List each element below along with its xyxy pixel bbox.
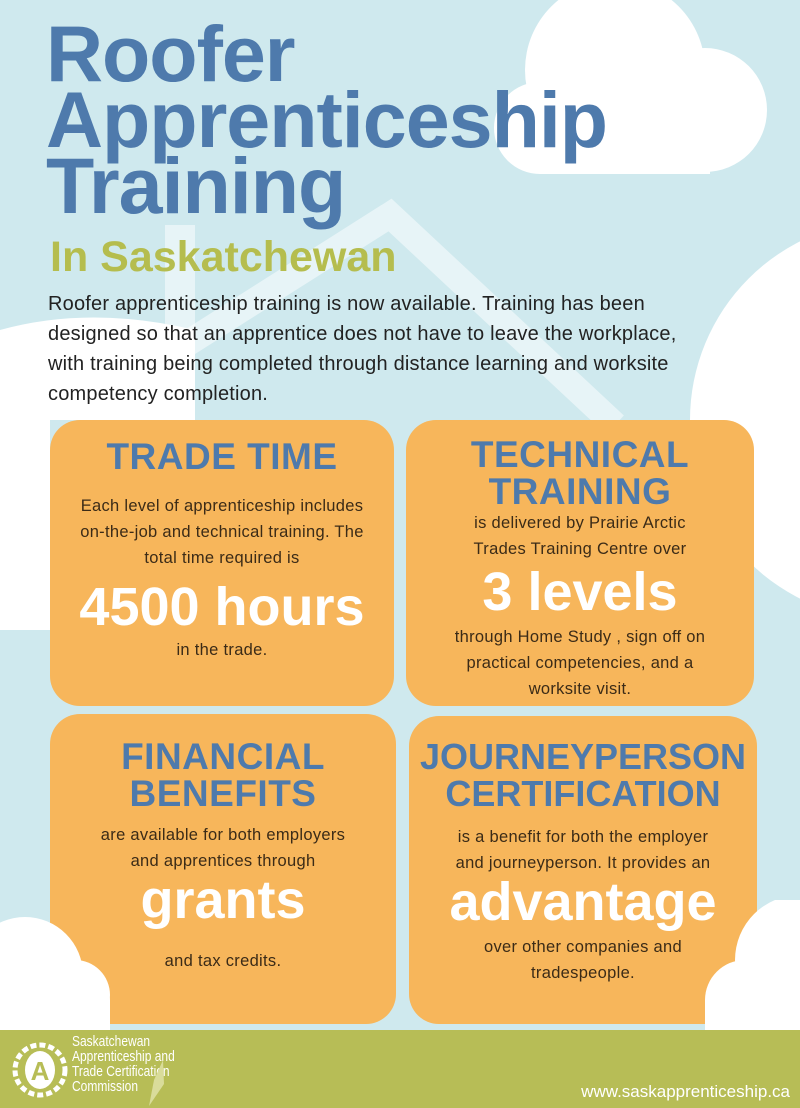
text: home study: worksite visit. — [529, 680, 631, 698]
intro paragraph: with training being completed through distance learning and worksite — [48, 353, 669, 375]
text: trade time: Each level of apprenticeship includes — [81, 497, 363, 515]
text: grants intro: and apprentices through — [131, 852, 315, 870]
text: grants intro: are available for both employers — [101, 826, 345, 844]
text: over others: tradespeople. — [531, 964, 635, 982]
organisation name: Saskatchewan — [72, 1033, 150, 1050]
organisation name: Commission — [72, 1078, 138, 1095]
title: Roofer — [46, 9, 295, 98]
text: delivered — [474, 514, 686, 558]
text: over others — [484, 938, 682, 982]
text: benefit: and journeyperson. It provides an — [456, 854, 710, 872]
heading: financial benefits: FINANCIAL — [121, 736, 325, 777]
heading: journeyperson — [420, 736, 746, 814]
title — [46, 9, 607, 230]
text: benefit: is a benefit for both the employer — [458, 828, 708, 846]
heading: financial benefits: BENEFITS — [130, 773, 316, 814]
text: delivered: is delivered by Prairie Arctic — [474, 514, 686, 532]
text: trade time: on-the-job and technical training. The — [80, 523, 364, 541]
organisation name — [72, 1033, 175, 1095]
intro paragraph — [48, 293, 676, 405]
text: in the trade: in the trade. — [176, 641, 268, 659]
panel: journeyperson certification — [409, 716, 757, 1024]
number: 4500 hours: 4500 hours — [79, 577, 365, 637]
icon: wheat — [149, 1060, 164, 1106]
panel: technical training — [406, 420, 754, 706]
intro paragraph: competency completion. — [48, 383, 268, 405]
title: Apprenticeship — [46, 75, 607, 164]
footer band — [0, 1030, 800, 1108]
heading: journeyperson: JOURNEYPERSON — [420, 736, 746, 777]
heading: financial benefits — [121, 736, 325, 814]
text: home study — [455, 628, 705, 698]
logo icon: A — [31, 1056, 50, 1086]
panel: trade time — [50, 420, 394, 706]
text: trade time — [80, 497, 364, 567]
heading: technical training: TECHNICAL — [471, 434, 689, 475]
word: grants: grants — [140, 870, 306, 930]
organisation name: Apprenticeship and — [72, 1048, 175, 1065]
title: Training — [46, 141, 345, 230]
heading: trade time: TRADE TIME — [106, 436, 338, 477]
panel: financial benefits — [50, 714, 396, 1024]
text: benefit — [456, 828, 710, 872]
heading: journeyperson: CERTIFICATION — [445, 773, 721, 814]
text: over others: over other companies and — [484, 938, 682, 956]
website: www.saskapprenticeship.ca — [581, 1082, 790, 1101]
text: grants intro — [101, 826, 345, 870]
word: advantage: advantage — [449, 872, 717, 932]
organisation name: Trade Certification — [72, 1063, 170, 1080]
text: delivered: Trades Training Centre over — [474, 540, 686, 558]
heading: technical training — [471, 434, 689, 512]
intro paragraph: Roofer apprenticeship training is now available. Training has been — [48, 293, 645, 315]
number: 3 levels: 3 levels — [482, 562, 678, 622]
subtitle: In Saskatchewan — [50, 233, 397, 281]
intro paragraph: designed so that an apprentice does not have to leave the workplace, — [48, 323, 676, 345]
text: trade time: total time required is — [144, 549, 300, 567]
text: home study: practical competencies, and a — [466, 654, 694, 672]
text: home study: through Home Study , sign off on — [455, 628, 705, 646]
text: tax credits: and tax credits. — [165, 952, 281, 970]
foreground clouds — [0, 900, 800, 1030]
heading: technical training: TRAINING — [489, 471, 671, 512]
logo icon — [12, 1042, 68, 1098]
